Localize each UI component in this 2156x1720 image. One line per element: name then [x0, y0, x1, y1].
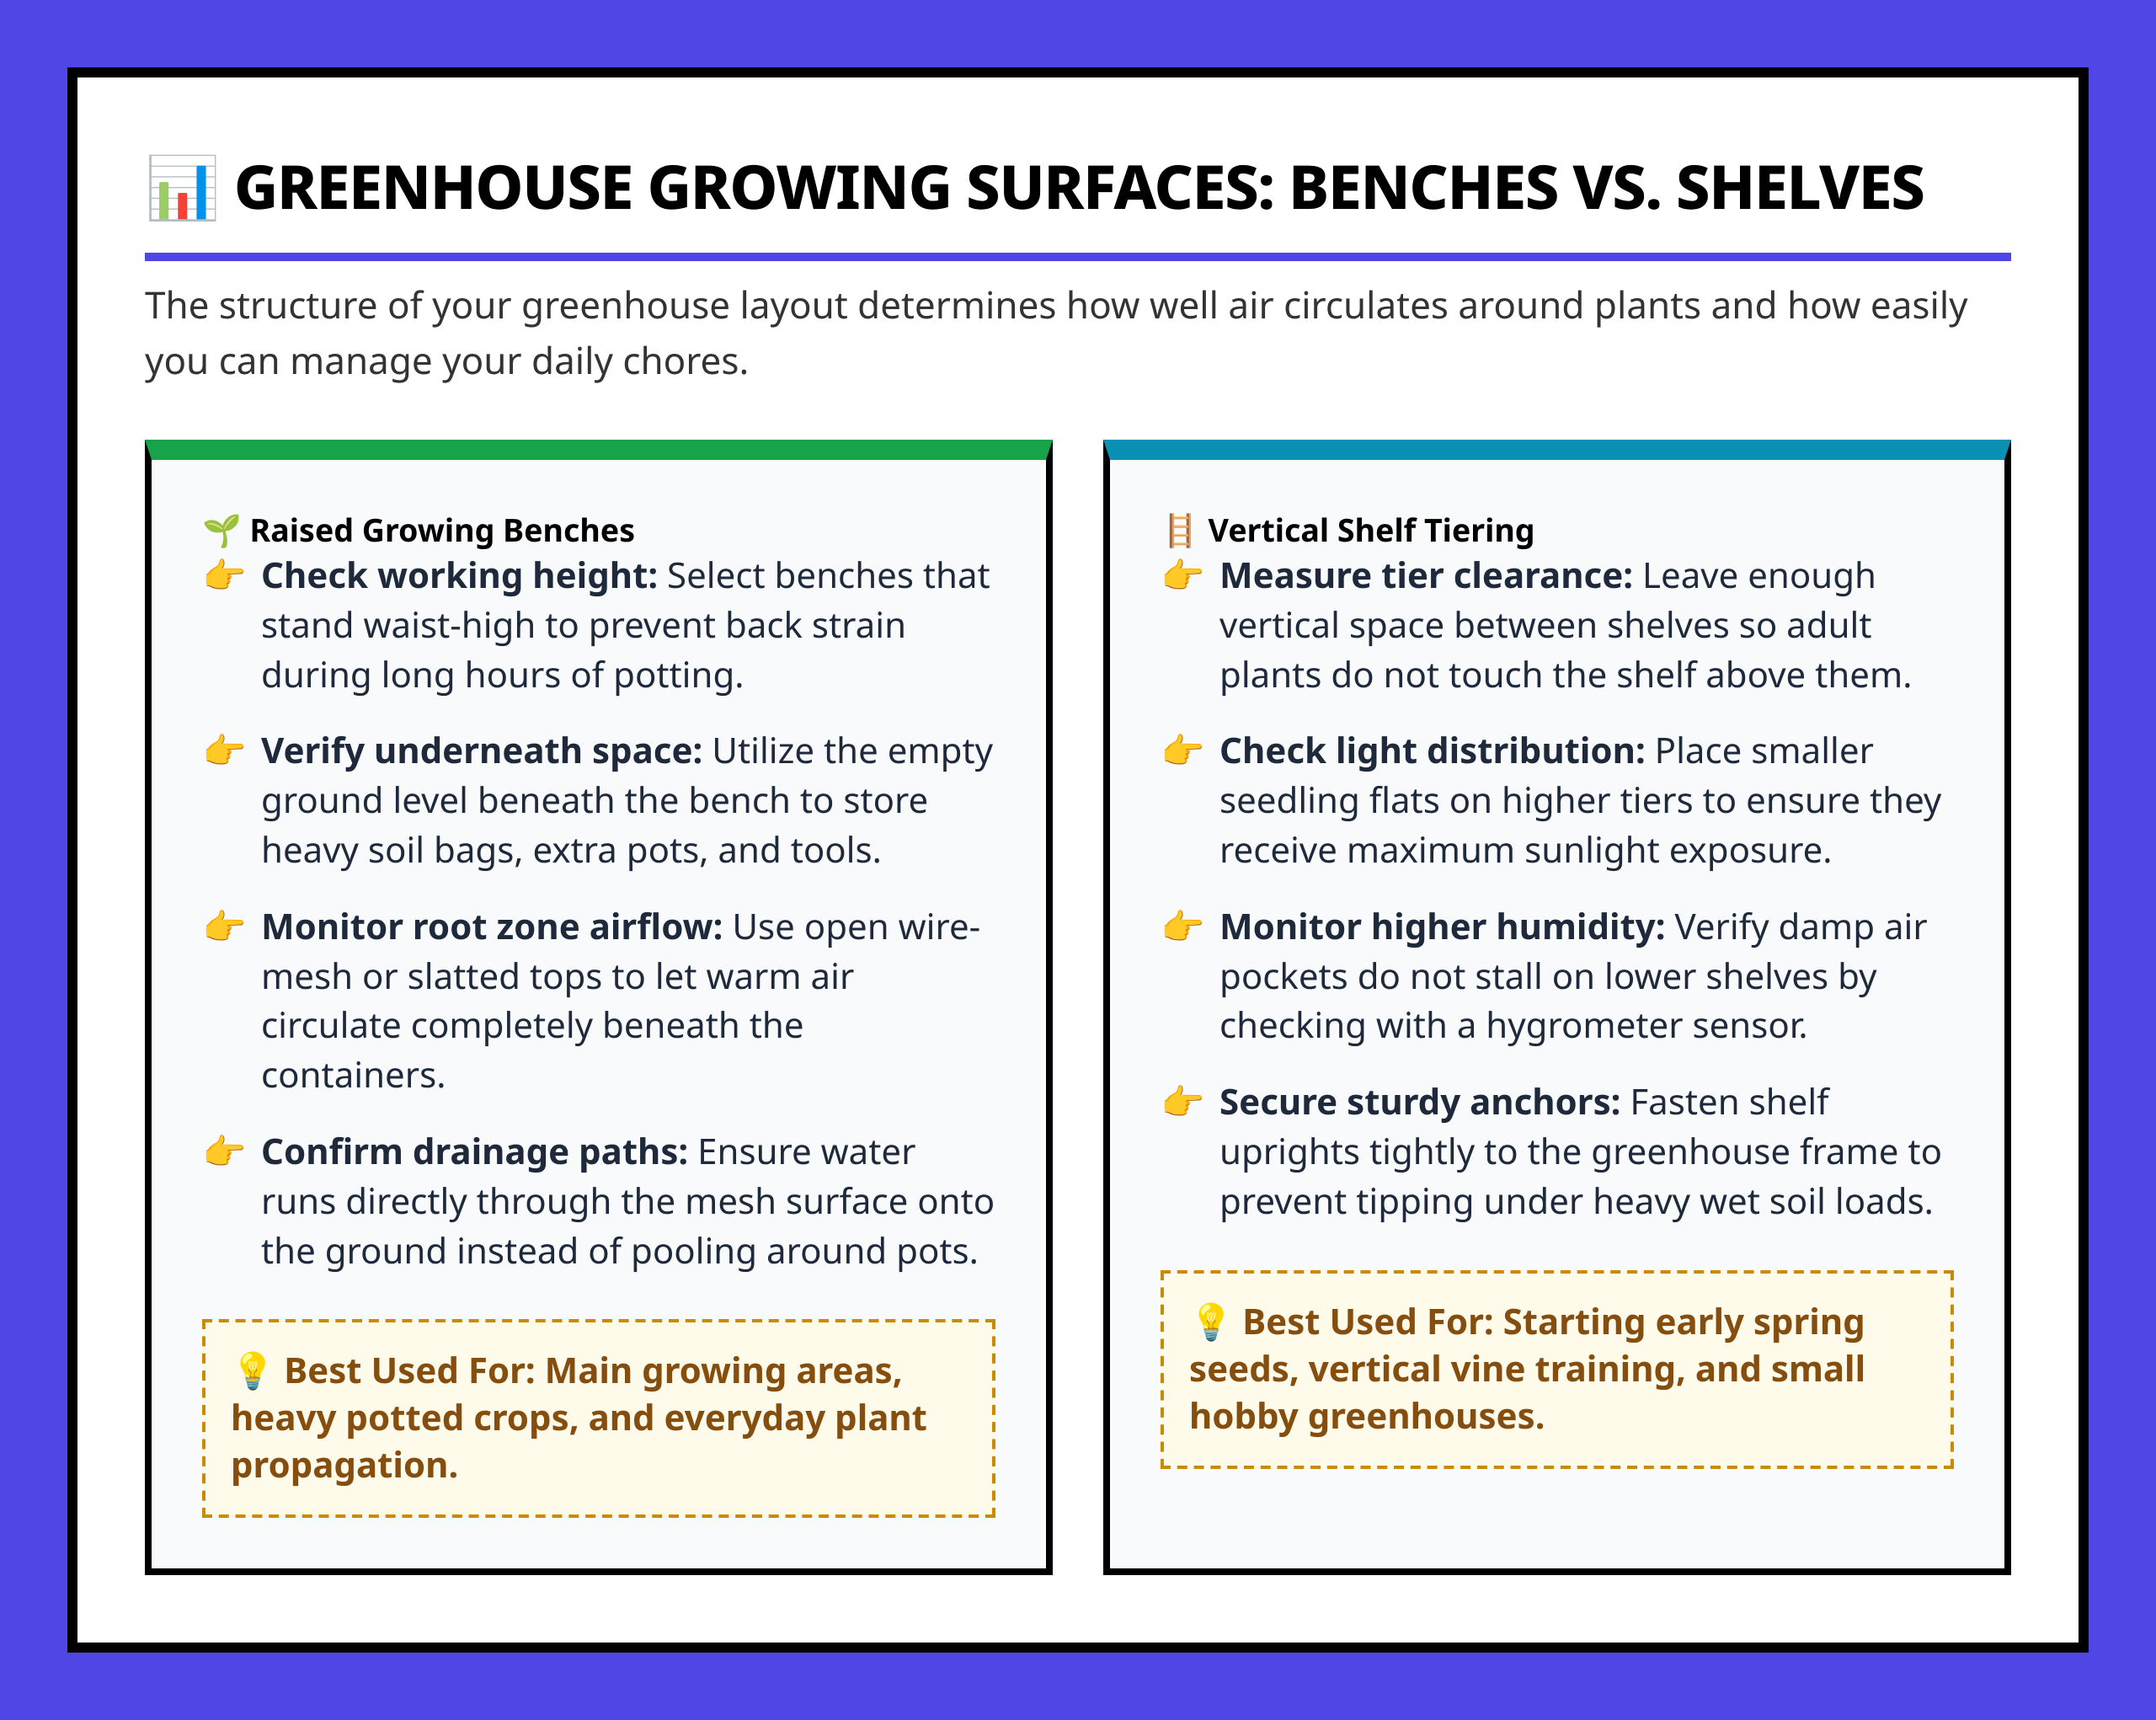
item: sturdy anchors: prevent tipping under heavy wet soil loads. [1219, 1177, 1934, 1225]
title: 📊 GREENHOUSE GROWING SURFACES: BENCHES VS. SHELVES [145, 145, 1924, 227]
item: root zone airflow: circulate completely beneath the [261, 1001, 804, 1049]
item: higher humidity: checking with a hygrometer sensor. [1219, 1001, 1808, 1049]
panel heading: benches: 🌱 Raised Growing Benches [202, 509, 635, 552]
item: working height: Check working height: Select benches that [261, 551, 990, 599]
item: tier clearance: Measure tier clearance: Leave enough [1219, 551, 1876, 599]
intro text: you can manage your daily chores. [145, 334, 749, 385]
item: sturdy anchors: 👉 [1161, 1077, 1204, 1125]
item: drainage paths [202, 1127, 995, 1274]
item: working height: 👉 [202, 551, 246, 599]
callout: best used for shelves [1161, 1270, 1954, 1469]
item: underneath space: heavy soil bags, extra pots, and tools. [261, 825, 882, 873]
intro text [145, 279, 1968, 385]
item: root zone airflow: mesh or slatted tops to let warm air [261, 952, 854, 1000]
callout: best used for benches: 💡 Best Used For: Main growing areas, [231, 1346, 903, 1394]
item: light distribution: seedling flats on higher tiers to ensure they [1219, 776, 1941, 824]
item: working height [202, 551, 990, 698]
item: sturdy anchors [1161, 1077, 1942, 1225]
callout: best used for shelves: seeds, vertical vine training, and small [1189, 1344, 1865, 1392]
item: sturdy anchors: Secure sturdy anchors: Fasten shelf [1219, 1077, 1829, 1125]
item: higher humidity: pockets do not stall on lower shelves by [1219, 952, 1876, 1000]
callout: best used for benches: propagation. [231, 1440, 458, 1488]
item: higher humidity [1161, 902, 1928, 1049]
item: root zone airflow: 👉 [202, 902, 246, 950]
item: root zone airflow: Monitor root zone airflow: Use open wire- [261, 902, 980, 950]
item: working height: during long hours of potting. [261, 650, 744, 698]
item: tier clearance: vertical space between shelves so adult [1219, 601, 1872, 649]
item: light distribution: receive maximum sunlight exposure. [1219, 825, 1833, 873]
callout: best used for benches [202, 1319, 995, 1518]
panel heading: shelves: 🪜 Vertical Shelf Tiering [1161, 509, 1535, 552]
checklist: benches [202, 551, 995, 1274]
item: higher humidity: 👉 [1161, 902, 1204, 950]
item: tier clearance: 👉 [1161, 551, 1204, 599]
item: drainage paths: 👉 [202, 1127, 246, 1175]
intro text: The structure of your greenhouse layout determines how well air circulates around plants and how easily [145, 279, 1968, 329]
item: light distribution [1161, 726, 1942, 873]
item: underneath space: ground level beneath the bench to store [261, 776, 928, 824]
item: tier clearance: plants do not touch the shelf above them. [1219, 650, 1912, 698]
item: light distribution: Check light distribution: Place smaller [1219, 726, 1874, 774]
checklist: shelves [1161, 551, 1942, 1225]
item: higher humidity: Monitor higher humidity: Verify damp air [1219, 902, 1928, 950]
panel: vertical shelf tiering [1103, 440, 2011, 1575]
item: drainage paths: runs directly through the mesh surface onto [261, 1177, 995, 1225]
callout: best used for benches: heavy potted crops, and everyday plant [231, 1393, 927, 1441]
item: tier clearance [1161, 551, 1912, 698]
title [145, 77, 2011, 261]
item: root zone airflow [202, 902, 980, 1098]
item: sturdy anchors: uprights tightly to the greenhouse frame to [1219, 1127, 1942, 1175]
item: drainage paths: the ground instead of pooling around pots. [261, 1226, 979, 1274]
callout: best used for shelves: hobby greenhouses. [1189, 1391, 1545, 1440]
item: underneath space: 👉 [202, 726, 246, 774]
item: underneath space [202, 726, 993, 873]
item: underneath space: Verify underneath space: Utilize the empty [261, 726, 993, 774]
panel: raised growing benches [145, 440, 1053, 1575]
item: root zone airflow: containers. [261, 1050, 446, 1098]
item: drainage paths: Confirm drainage paths: Ensure water [261, 1127, 915, 1175]
item: light distribution: 👉 [1161, 726, 1204, 774]
item: working height: stand waist-high to prevent back strain [261, 601, 906, 649]
callout: best used for shelves: 💡 Best Used For: Starting early spring [1189, 1297, 1865, 1345]
